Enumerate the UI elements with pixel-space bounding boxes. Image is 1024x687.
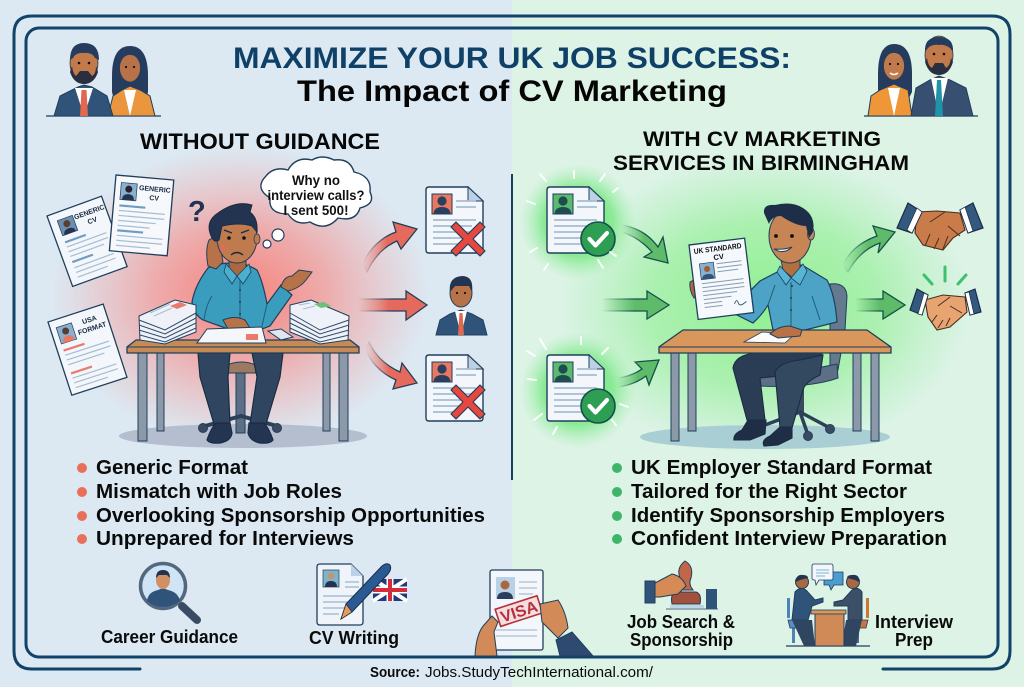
note paper	[744, 332, 795, 343]
list: drawbacks: Overlooking Sponsorship Opportunities	[96, 505, 485, 527]
sparkles around accepted CVs	[527, 171, 628, 434]
icon: visa document and hands	[475, 570, 593, 656]
legs	[733, 353, 823, 446]
list: drawbacks: Generic Format	[96, 457, 248, 479]
phone	[268, 329, 293, 340]
label: interview prep	[875, 612, 954, 650]
list: drawbacks	[77, 457, 485, 550]
icon: interview prep	[786, 564, 870, 646]
icon: visa document and hands: VISA	[499, 598, 540, 626]
label: job search and sponsorship: Job Search &	[627, 612, 735, 632]
desk shadow	[640, 425, 890, 449]
flag	[373, 579, 407, 601]
cv sheet: generic CV tilted left: GENERIC	[73, 204, 106, 222]
label: interview prep: Prep	[895, 630, 933, 650]
icon: CV writing	[317, 564, 407, 625]
desk top	[659, 330, 891, 353]
list: benefits	[612, 457, 947, 550]
hand on desk	[223, 318, 250, 329]
people: top right pair	[864, 36, 978, 116]
green glow: bottom document	[520, 332, 636, 448]
title: The Impact of CV Marketing	[297, 75, 727, 108]
UK standard CV held up: UK STANDARD	[693, 241, 743, 256]
hand on head	[207, 238, 223, 269]
panel heading: with CV marketing: SERVICES IN BIRMINGHAM	[613, 151, 909, 175]
panel heading: with CV marketing: WITH CV MARKETING	[643, 127, 881, 151]
arrow: green straight	[602, 291, 669, 319]
handshake bottom	[910, 289, 981, 330]
shirt and arms	[733, 265, 837, 330]
question mark: ?	[188, 196, 206, 228]
illustration: without guidance desk	[119, 196, 367, 448]
sparkle lines above handshake	[924, 267, 966, 284]
desk legs	[671, 353, 879, 441]
arrow: red curved down	[366, 342, 417, 389]
cv sheet: USA format: USA	[81, 315, 98, 326]
cv sheet: generic CV upright	[109, 175, 174, 256]
list: drawbacks: Mismatch with Job Roles	[96, 481, 342, 503]
desk legs	[138, 353, 348, 441]
rejected CV bottom	[426, 355, 485, 421]
list: benefits: Confident Interview Preparation	[631, 528, 947, 550]
icon: career guidance magnifier	[140, 564, 197, 620]
torso and arms	[192, 263, 292, 329]
arrow: green curved to handshake	[843, 226, 895, 272]
cv sheet: generic CV upright: CV	[149, 195, 160, 203]
icon: job search stamp	[645, 561, 718, 609]
hair	[764, 204, 814, 238]
background: left blue half	[0, 0, 512, 687]
accepted CV top	[547, 187, 615, 256]
cv sheet: USA format	[48, 304, 127, 395]
right paper stack	[290, 300, 349, 344]
open papers	[197, 327, 266, 343]
list: benefits: Identify Sponsorship Employers	[631, 505, 945, 527]
red stress glow	[50, 145, 430, 445]
hair	[209, 204, 257, 241]
hand on desk	[770, 326, 802, 338]
thought bubble: I sent 500!	[284, 202, 348, 218]
source line: Source:	[370, 664, 420, 681]
hand behind CV	[690, 279, 704, 298]
cv sheet: generic CV upright: GENERIC	[139, 185, 171, 195]
head	[217, 213, 257, 263]
desk shadow	[119, 424, 367, 448]
label: job search and sponsorship	[627, 612, 735, 650]
arrow: green lower	[618, 360, 659, 387]
green glow: top document	[520, 164, 636, 280]
rejected CV top	[426, 187, 485, 256]
cv sheet: generic CV tilted left: CV	[87, 216, 99, 226]
green success glow	[560, 155, 970, 455]
title: MAXIMIZE YOUR UK JOB SUCCESS:	[233, 42, 791, 75]
list: benefits: UK Employer Standard Format	[631, 457, 932, 479]
office chair	[757, 284, 847, 440]
chair	[198, 362, 282, 433]
cv sheet: generic CV tilted left	[47, 196, 127, 286]
thought bubble dots	[263, 229, 284, 248]
arrow: green straight to handshake	[855, 291, 905, 319]
head	[769, 209, 811, 263]
label: career guidance: Career Guidance	[101, 627, 238, 647]
label: CV writing: CV Writing	[309, 628, 399, 648]
left paper stack	[139, 300, 196, 344]
thought bubble	[261, 157, 372, 226]
raised open hand	[281, 270, 312, 291]
neck	[780, 255, 800, 278]
cv sheet: USA format: FORMAT	[77, 321, 108, 337]
legs	[198, 353, 283, 443]
smile	[774, 234, 778, 238]
label: interview prep: Interview	[875, 612, 954, 632]
background: right green half	[512, 0, 1024, 687]
arrow: red curved up	[363, 222, 417, 272]
people: top left pair	[46, 43, 161, 116]
illustration: with CV marketing desk	[640, 204, 891, 449]
list: benefits: Tailored for the Right Sector	[631, 481, 907, 503]
candidate bust	[436, 276, 487, 335]
desk top	[127, 340, 359, 353]
source line: Jobs.StudyTechInternational.com/	[425, 664, 654, 681]
label: job search and sponsorship: Sponsorship	[630, 630, 733, 650]
arrow: red straight	[358, 291, 427, 320]
center divider	[511, 174, 513, 480]
neck and collar	[229, 255, 246, 276]
list: drawbacks: Unprepared for Interviews	[96, 528, 354, 550]
panel heading: without guidance: WITHOUT GUIDANCE	[140, 129, 380, 154]
pen	[341, 564, 391, 619]
title	[233, 42, 791, 108]
thought bubble: Why no	[292, 172, 340, 188]
UK standard CV held up	[689, 238, 754, 319]
accepted CV bottom	[547, 355, 615, 423]
thought bubble: interview calls?	[268, 187, 364, 203]
arrow: green top	[622, 225, 668, 263]
face	[227, 236, 231, 240]
UK standard CV held up: CV	[713, 252, 724, 262]
handshake top	[897, 203, 983, 250]
panel heading: with CV marketing	[613, 127, 909, 175]
